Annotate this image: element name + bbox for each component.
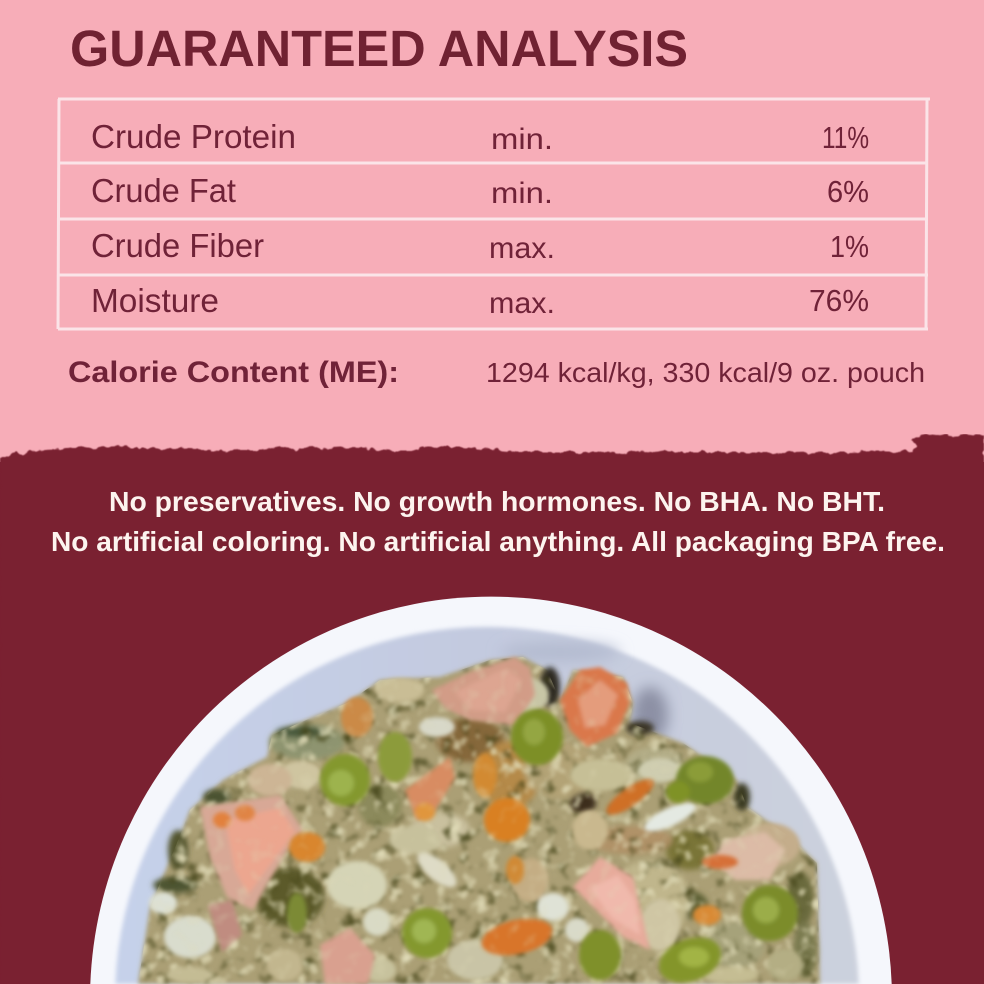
carrot pieces	[213, 697, 738, 961]
row: moisture: Moisture	[91, 282, 219, 319]
photo: bowl of food	[90, 597, 892, 984]
row: moisture: max.	[489, 287, 555, 320]
salmon pieces	[200, 657, 785, 984]
table grid lines	[58, 99, 930, 329]
row: crude fiber: max.	[489, 232, 555, 265]
calorie content line	[68, 356, 925, 389]
rice pieces	[149, 677, 803, 983]
claims text: No artificial coloring. No artificial anything. All packaging BPA free.	[51, 526, 945, 557]
bowl inner wall	[115, 627, 859, 984]
claims text	[51, 486, 945, 557]
panel: pink analysis section	[0, 0, 984, 462]
white rice highlight	[641, 797, 699, 837]
title: GUARANTEED ANALYSIS	[70, 20, 688, 77]
row: moisture: 76%	[809, 283, 869, 318]
panel: maroon section with torn edge	[0, 434, 984, 984]
row: crude fiber: Crude Fiber	[91, 227, 264, 264]
claims text: No preservatives. No growth hormones. No BHA. No BHT.	[109, 486, 885, 517]
calorie content line: 1294 kcal/kg, 330 kcal/9 oz. pouch	[486, 357, 925, 388]
food texture speckle	[130, 650, 830, 984]
table: guaranteed analysis	[58, 99, 930, 329]
food colour zones and shadows	[153, 667, 817, 978]
bowl rim	[90, 597, 892, 984]
row: crude fat: 6%	[827, 174, 869, 209]
row: crude protein: min.	[491, 123, 553, 156]
row: crude fat: min.	[491, 177, 553, 210]
calorie content line: Calorie Content (ME):	[68, 356, 399, 389]
row: crude protein	[91, 118, 869, 156]
food mass	[138, 657, 820, 984]
row: crude fat: Crude Fat	[91, 172, 236, 209]
row: moisture	[91, 282, 869, 320]
row: crude protein: Crude Protein	[91, 118, 296, 155]
peas	[287, 709, 798, 984]
bowl wall shadow	[500, 642, 668, 743]
row: crude protein: 11%	[822, 120, 869, 155]
row: crude fiber	[91, 227, 869, 265]
row: crude fat	[91, 172, 869, 210]
light texture over food	[174, 669, 813, 980]
row: crude fiber: 1%	[830, 229, 869, 264]
